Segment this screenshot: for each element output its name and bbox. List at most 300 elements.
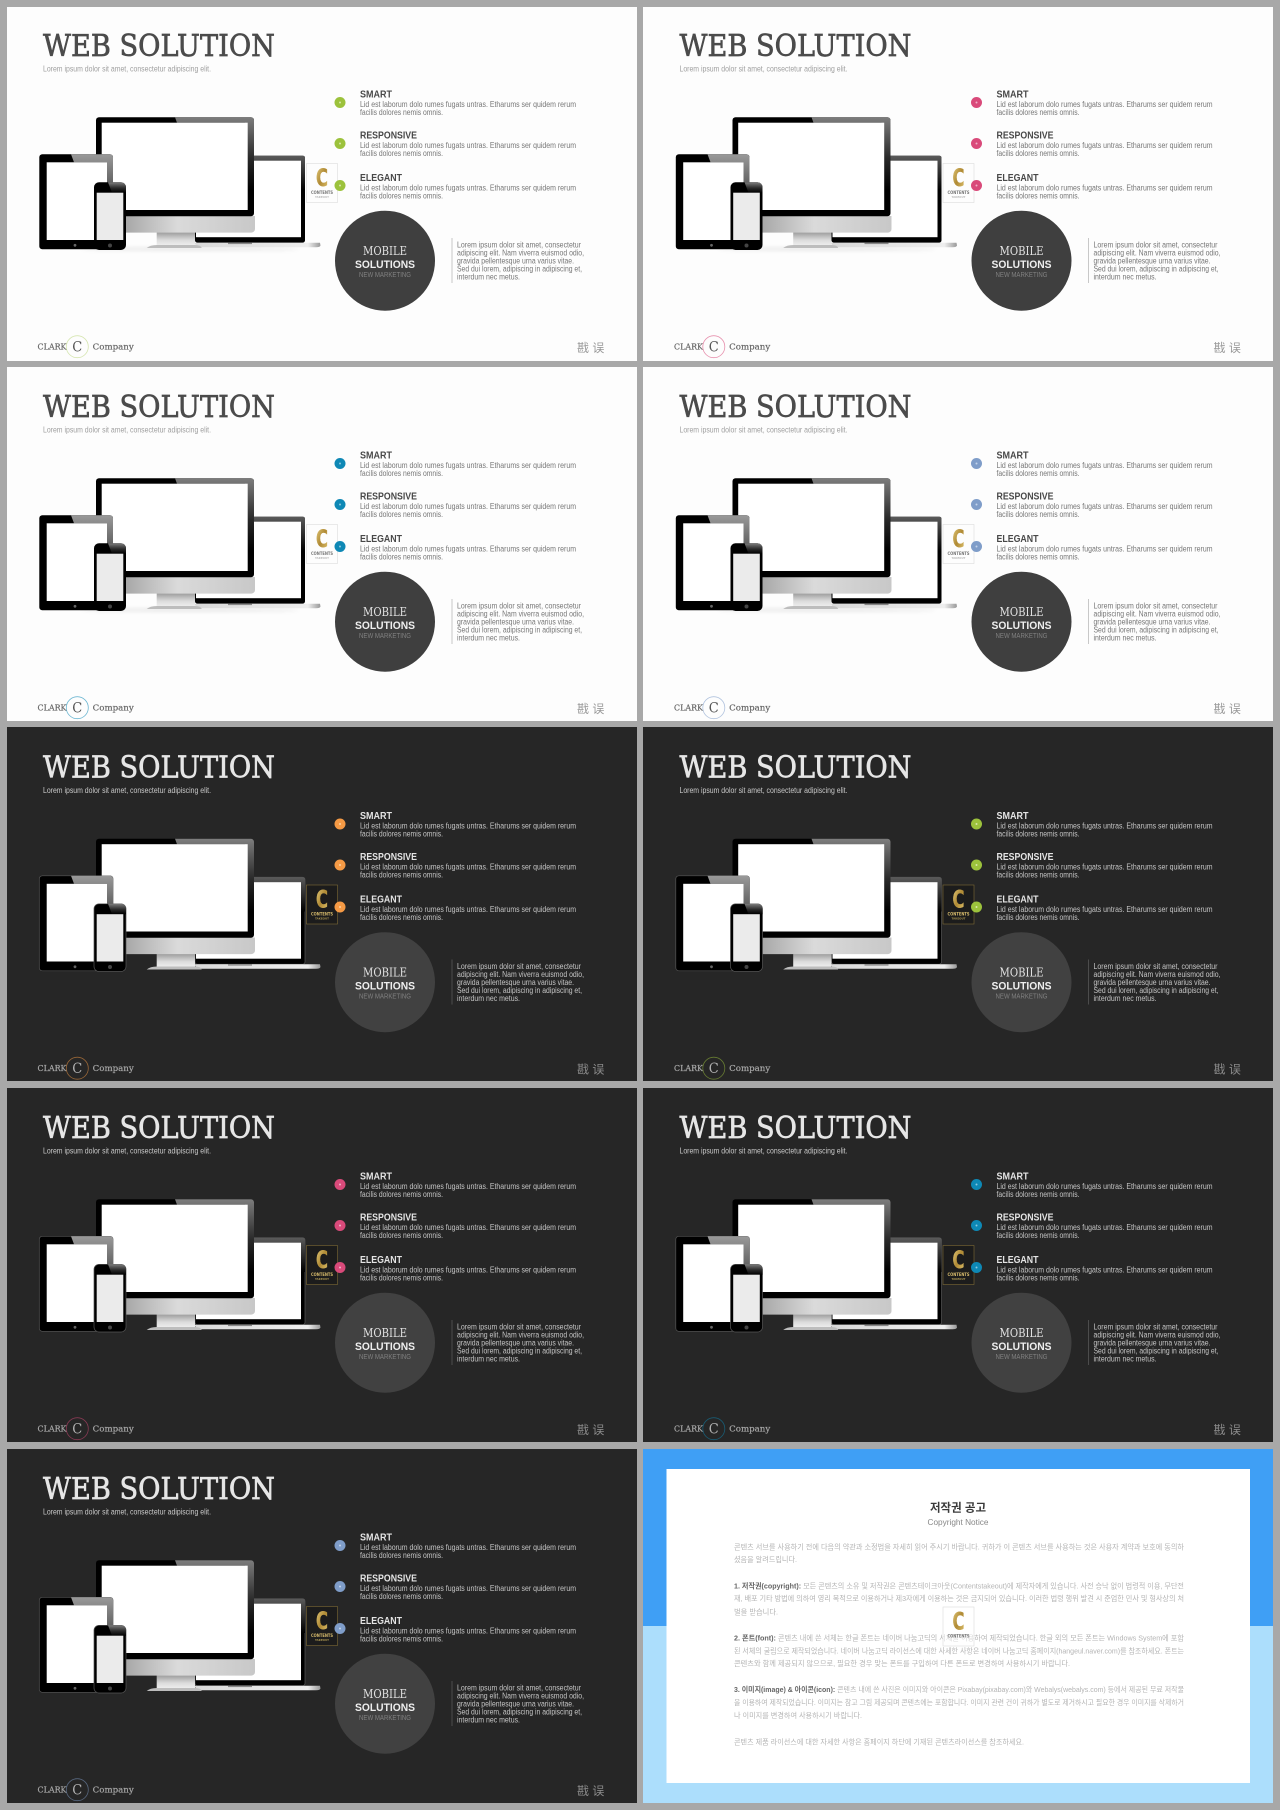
logo [674, 336, 770, 358]
badge watermark: CONTENTS [948, 1634, 970, 1640]
description text: adipiscing elit. Nam viverra euismod odio, [457, 1691, 584, 1701]
footer glyphs: 戡 误 [1214, 341, 1241, 355]
logo: Company [93, 342, 134, 352]
subtitle: Lorem ipsum dolor sit amet, consectetur adipiscing elit. [680, 1146, 848, 1156]
logo [674, 1418, 770, 1440]
feature: elegant: Lid est laborum dolo rumes fugats untras. Etharums ser quidem rerum [360, 905, 576, 914]
subtitle: Lorem ipsum dolor sit amet, consectetur adipiscing elit. [43, 1146, 211, 1156]
description text: Lorem ipsum dolor sit amet, consectetur [457, 240, 581, 249]
feature: responsive [971, 852, 1213, 879]
badge: C [316, 525, 328, 553]
copyright heading: 저작권 공고 [930, 1500, 986, 1514]
feature: responsive: Lid est laborum dolo rumes fugats untras. Etharums ser quidem rerum [996, 141, 1213, 150]
feature: elegant: ELEGANT [360, 894, 403, 905]
badge watermark [943, 1607, 974, 1646]
feature: responsive [334, 130, 576, 158]
device mockups [676, 117, 957, 250]
badge: TAKEOUT [315, 1277, 329, 1281]
description text: interdum nec metus. [1094, 994, 1156, 1003]
description text: Lorem ipsum dolor sit amet, consectetur [457, 962, 581, 971]
slide 7 content [38, 1111, 604, 1440]
footer glyphs: 戡 误 [577, 341, 604, 355]
title: WEB SOLUTION [43, 1472, 275, 1507]
description text [452, 960, 584, 1004]
feature: elegant: ELEGANT [360, 173, 403, 184]
description text: Sed dui lorem, adipiscing in adipiscing et, [1094, 626, 1218, 635]
feature: elegant: facilis dolores nemis omnis. [360, 913, 443, 922]
feature: elegant [971, 894, 1213, 922]
badge [306, 885, 338, 924]
section 1 copyright: 재, 배포 기타 방법에 의하여 영리 목적으로 이용하거나 제3자에게 이용하는 것은 금지되어 있습니다. 이러한 법령 행위 발견 시 준엄한 민사 및 형사상의 처 [734, 1594, 1184, 1603]
feature: elegant [334, 1616, 576, 1643]
feature: elegant: facilis dolores nemis omnis. [360, 191, 443, 200]
logo: Company [729, 1424, 770, 1434]
section 1 copyright [734, 1582, 1184, 1616]
subtitle: Lorem ipsum dolor sit amet, consectetur adipiscing elit. [680, 426, 848, 434]
section 3 image and icon: 을 이용하여 제작되었습니다. 이미지는 참고 그림 제공되며 콘텐츠에는 포함합니다. 이미지 관련 건이 귀하가 별도로 제거하시고 필요한 경우 이미지를 삭제하거 [734, 1698, 1184, 1707]
feature: responsive: facilis dolores nemis omnis. [996, 870, 1080, 879]
feature: smart: Lid est laborum dolo rumes fugats untras. Etharums ser quidem rerum [996, 821, 1213, 830]
description text: adipiscing elit. Nam viverra euismod odio, [457, 248, 584, 258]
slide 8 content [674, 1111, 1241, 1440]
footer glyphs: 戡 误 [577, 1062, 604, 1076]
feature: smart: SMART [360, 1532, 393, 1543]
section 3 image and icon: 3. 이미지(image) & 아이콘(icon): 콘텐츠 내에 쓴 사진은 이미지와 아이콘은 Pixabay(pixabay.com)와 Webalys(webalys.com) 등에서 제공된 무료 저작물 [734, 1685, 1184, 1694]
logo: Company [729, 342, 770, 352]
slide 4 content [674, 390, 1241, 719]
feature: responsive: RESPONSIVE [360, 1573, 417, 1584]
logo: C [709, 340, 719, 356]
description text: Lorem ipsum dolor sit amet, consectetur [457, 601, 581, 610]
circle: mobile solutions: NEW MARKETING [359, 1715, 411, 1722]
logo: CLARK [38, 1064, 67, 1074]
logo: C [72, 1782, 82, 1798]
feature: smart: SMART [996, 1171, 1029, 1182]
section 2 font [734, 1634, 1184, 1668]
feature: responsive: facilis dolores nemis omnis. [360, 149, 443, 158]
circle: mobile solutions: MOBILE [363, 244, 407, 258]
circle: mobile solutions: SOLUTIONS [355, 980, 415, 992]
circle: mobile solutions: NEW MARKETING [996, 633, 1048, 640]
panel: slide 5 dark orange [7, 727, 637, 1081]
feature: smart [334, 450, 576, 478]
description text: interdum nec metus. [1094, 273, 1156, 282]
subtitle: Lorem ipsum dolor sit amet, consectetur adipiscing elit. [43, 64, 211, 74]
description text: Lorem ipsum dolor sit amet, consectetur [1094, 601, 1218, 610]
title: WEB SOLUTION [43, 750, 275, 786]
feature: responsive [971, 130, 1213, 158]
slide 9 content [38, 1472, 604, 1801]
feature: elegant: Lid est laborum dolo rumes fugats untras. Etharums ser quidem rerum [996, 183, 1213, 192]
circle: mobile solutions: MOBILE [363, 966, 407, 980]
feature: responsive: facilis dolores nemis omnis. [360, 1592, 443, 1601]
badge [943, 524, 974, 564]
feature: smart [334, 1171, 576, 1199]
feature: elegant: ELEGANT [360, 1616, 403, 1627]
description text: adipiscing elit. Nam viverra euismod odio, [1094, 1330, 1220, 1340]
feature: responsive: facilis dolores nemis omnis. [360, 1231, 443, 1240]
feature: responsive: facilis dolores nemis omnis. [360, 870, 443, 879]
description text [452, 238, 584, 283]
badge: CONTENTS [948, 1272, 970, 1278]
description text: gravida pellentesque urna varius vitae. [1094, 618, 1210, 627]
badge: CONTENTS [311, 190, 333, 196]
footer glyphs: 戡 误 [577, 702, 604, 716]
feature: elegant [971, 534, 1213, 561]
description text: Sed dui lorem, adipiscing in adipiscing et, [1094, 265, 1218, 274]
feature: elegant: Lid est laborum dolo rumes fugats untras. Etharums ser quidem rerum [360, 1265, 576, 1274]
section 3 image and icon [734, 1685, 1184, 1720]
copyright subheading: Copyright Notice [928, 1517, 989, 1527]
feature: elegant [334, 173, 576, 200]
description text: Sed dui lorem, adipiscing in adipiscing et, [457, 1347, 582, 1356]
feature: elegant: ELEGANT [360, 534, 403, 545]
circle: mobile solutions: SOLUTIONS [355, 620, 415, 632]
circle: mobile solutions: SOLUTIONS [992, 1341, 1052, 1353]
badge: C [952, 164, 964, 192]
badge: CONTENTS [948, 551, 970, 557]
footer glyphs: 戡 误 [1214, 1423, 1241, 1437]
description text: interdum nec metus. [457, 1716, 520, 1725]
description text: gravida pellentesque urna varius vitae. [457, 1339, 574, 1348]
description text [452, 1320, 584, 1365]
feature: elegant [971, 173, 1213, 200]
feature: elegant: Lid est laborum dolo rumes fugats untras. Etharums ser quidem rerum [996, 905, 1213, 914]
feature: smart: facilis dolores nemis omnis. [996, 108, 1080, 117]
circle: mobile solutions [335, 1293, 435, 1393]
section 2 font: 된 서체의 굴림으로 제작되었습니다. 네이버 나눔고딕 라이선스에 대한 사세한 사항은 네이버 나눔고딕 홈페이지(hangeul.naver.com)를 참조하세요. 폰트는 [734, 1646, 1184, 1656]
feature: smart: Lid est laborum dolo rumes fugats untras. Etharums ser quidem rerum [996, 100, 1213, 109]
circle: mobile solutions [335, 1654, 435, 1754]
badge: C [316, 164, 328, 192]
description text: gravida pellentesque urna varius vitae. [1094, 1339, 1210, 1348]
slide 6 content [674, 750, 1241, 1079]
feature: elegant: Lid est laborum dolo rumes fugats untras. Etharums ser quidem rerum [360, 1626, 576, 1635]
feature: smart: facilis dolores nemis omnis. [996, 1190, 1080, 1199]
logo: C [709, 1061, 719, 1077]
panel: slide 4 light periwinkle [643, 367, 1273, 721]
logo [38, 336, 134, 358]
logo: Company [93, 1424, 134, 1434]
feature: smart [971, 89, 1213, 117]
description text: Lorem ipsum dolor sit amet, consectetur [1094, 962, 1218, 971]
logo [38, 697, 134, 719]
description text: gravida pellentesque urna varius vitae. [457, 618, 574, 627]
description text: Sed dui lorem, adipiscing in adipiscing et, [457, 986, 582, 995]
description text: interdum nec metus. [457, 994, 520, 1003]
logo: C [72, 340, 82, 356]
feature: responsive: Lid est laborum dolo rumes fugats untras. Etharums ser quidem rerum [360, 1584, 576, 1593]
description text: adipiscing elit. Nam viverra euismod odio, [1094, 609, 1220, 619]
feature: elegant: ELEGANT [996, 1255, 1039, 1266]
feature: smart: Lid est laborum dolo rumes fugats untras. Etharums ser quidem rerum [360, 100, 576, 109]
description text: Sed dui lorem, adipiscing in adipiscing et, [1094, 1347, 1218, 1356]
device mockups [676, 1199, 957, 1332]
intro paragraph: 셨음을 알려드립니다. [734, 1555, 797, 1564]
feature: elegant: facilis dolores nemis omnis. [996, 913, 1080, 922]
footer glyphs: 戡 误 [1214, 1062, 1241, 1076]
description text: gravida pellentesque urna varius vitae. [1094, 257, 1210, 266]
panel: copyright notice [643, 1449, 1273, 1803]
logo: Company [93, 1786, 134, 1796]
circle: mobile solutions [972, 211, 1072, 311]
title: WEB SOLUTION [43, 390, 275, 425]
feature: smart: Lid est laborum dolo rumes fugats untras. Etharums ser quidem rerum [360, 1543, 576, 1552]
feature: responsive [334, 852, 576, 879]
feature: smart: facilis dolores nemis omnis. [360, 1190, 443, 1199]
feature: elegant: facilis dolores nemis omnis. [996, 552, 1080, 561]
badge: CONTENTS [311, 1633, 333, 1639]
badge: C [316, 1607, 328, 1635]
device mockups [39, 117, 321, 250]
slide 5 content [38, 750, 604, 1079]
feature: responsive: RESPONSIVE [996, 130, 1054, 141]
section 2 font: 2. 폰트(font): 콘텐츠 내에 쓴 서체는 한글 폰트는 네이버 나눔고딕의 서체를 이용하여 제작되었습니다. 한글 외의 모든 폰트는 Windows System에 포함 [734, 1634, 1184, 1642]
badge: TAKEOUT [315, 916, 329, 920]
feature: elegant: facilis dolores nemis omnis. [360, 552, 443, 561]
circle: mobile solutions: SOLUTIONS [992, 259, 1052, 271]
feature: smart: Lid est laborum dolo rumes fugats untras. Etharums ser quidem rerum [360, 821, 576, 830]
circle: mobile solutions [972, 932, 1072, 1032]
circle: mobile solutions: MOBILE [1000, 244, 1044, 258]
footer glyphs: 戡 误 [577, 1423, 604, 1437]
logo: Company [729, 704, 770, 714]
feature: smart: Lid est laborum dolo rumes fugats untras. Etharums ser quidem rerum [996, 1182, 1213, 1191]
feature: elegant: ELEGANT [360, 1255, 403, 1266]
badge: C [316, 886, 328, 914]
description text: Lorem ipsum dolor sit amet, consectetur [457, 1683, 581, 1692]
badge: TAKEOUT [315, 556, 329, 560]
badge: CONTENTS [311, 551, 333, 557]
feature: elegant [334, 1255, 576, 1282]
circle: mobile solutions [972, 1293, 1072, 1393]
panel: slide 6 dark green [643, 727, 1273, 1081]
section 1 copyright: 1. 저작권(copyright): 모든 콘텐츠의 소유 및 저작권은 콘텐츠테이크아웃(Contentstakeout)에 제작자에게 있습니다. 사전 승낙 없이 법령적 이용, 무단전 [734, 1582, 1184, 1590]
feature: responsive: RESPONSIVE [360, 130, 417, 141]
title: WEB SOLUTION [43, 29, 275, 64]
badge: C [952, 525, 964, 553]
description text: Sed dui lorem, adipiscing in adipiscing et, [457, 626, 582, 635]
feature: smart [334, 89, 576, 117]
feature: responsive: facilis dolores nemis omnis. [996, 510, 1080, 519]
logo: Company [93, 1064, 134, 1074]
description text [1088, 960, 1220, 1004]
panel: slide 7 dark pink [7, 1088, 637, 1442]
device mockups [39, 1199, 321, 1332]
intro paragraph: 콘텐츠 서브를 사용하기 전에 다음의 약관과 소정법을 자세히 읽어 주시기 바랍니다. 귀하가 이 콘텐츠 서브를 사용하는 것은 사용자 계약과 보호에 동의하 [734, 1542, 1184, 1552]
feature: smart: facilis dolores nemis omnis. [360, 829, 443, 838]
circle: mobile solutions: NEW MARKETING [359, 994, 411, 1000]
panel: slide 1 light green [7, 7, 637, 361]
description text: adipiscing elit. Nam viverra euismod odio, [457, 970, 584, 979]
feature: elegant: facilis dolores nemis omnis. [360, 1634, 443, 1643]
badge [943, 164, 974, 202]
description text: interdum nec metus. [457, 634, 520, 643]
device mockups [39, 478, 321, 612]
title: WEB SOLUTION [680, 29, 912, 64]
title: WEB SOLUTION [680, 390, 912, 425]
device mockups [39, 839, 321, 972]
badge: TAKEOUT [952, 916, 966, 920]
circle: mobile solutions: SOLUTIONS [355, 259, 415, 271]
footer glyphs: 戡 误 [1214, 702, 1241, 716]
badge: CONTENTS [948, 190, 970, 196]
circle: mobile solutions: MOBILE [1000, 966, 1044, 980]
slide 3 content [38, 390, 604, 719]
badge: TAKEOUT [952, 195, 966, 199]
logo [38, 1779, 134, 1801]
description text: adipiscing elit. Nam viverra euismod odio, [1094, 970, 1220, 979]
feature: responsive [334, 1573, 576, 1601]
description text [1088, 599, 1220, 644]
feature: responsive [334, 1212, 576, 1240]
feature: elegant: ELEGANT [996, 534, 1039, 545]
feature: responsive: facilis dolores nemis omnis. [996, 1231, 1080, 1240]
description text [1088, 1320, 1220, 1365]
feature: smart: Lid est laborum dolo rumes fugats untras. Etharums ser quidem rerum [360, 1182, 576, 1191]
circle: mobile solutions: MOBILE [363, 1326, 407, 1340]
feature: smart: Lid est laborum dolo rumes fugats untras. Etharums ser quidem rerum [996, 461, 1213, 470]
badge [943, 885, 974, 924]
feature: smart [971, 1171, 1213, 1199]
logo: Company [729, 1064, 770, 1074]
circle: mobile solutions: MOBILE [1000, 605, 1044, 619]
feature: smart: SMART [360, 89, 393, 100]
logo [674, 697, 770, 719]
feature: responsive: Lid est laborum dolo rumes fugats untras. Etharums ser quidem rerum [996, 1223, 1213, 1232]
feature: elegant: facilis dolores nemis omnis. [996, 1273, 1080, 1282]
feature: smart: facilis dolores nemis omnis. [996, 469, 1080, 478]
description text [1088, 238, 1220, 283]
badge: TAKEOUT [952, 556, 966, 560]
badge: CONTENTS [311, 1272, 333, 1278]
description text: interdum nec metus. [1094, 1355, 1156, 1364]
feature: responsive: RESPONSIVE [360, 491, 417, 502]
feature: responsive: RESPONSIVE [996, 491, 1054, 502]
description text: adipiscing elit. Nam viverra euismod odio, [457, 609, 584, 619]
device mockups [676, 478, 957, 612]
feature: elegant: Lid est laborum dolo rumes fugats untras. Etharums ser quidem rerum [996, 544, 1213, 553]
description text: interdum nec metus. [457, 1355, 520, 1364]
badge: TAKEOUT [315, 1638, 329, 1642]
description text: Lorem ipsum dolor sit amet, consectetur [1094, 240, 1218, 249]
feature: smart: facilis dolores nemis omnis. [360, 1551, 443, 1560]
subtitle: Lorem ipsum dolor sit amet, consectetur adipiscing elit. [43, 1508, 211, 1516]
feature: responsive: Lid est laborum dolo rumes fugats untras. Etharums ser quidem rerum [360, 1223, 576, 1232]
section 2 font: 콘텐츠와 함께 제공되지 않으므로, 필요한 경우 맞는 폰트를 구입하여 다른 폰트로 변경하여 사용하시기 바랍니다. [734, 1659, 1070, 1668]
circle: mobile solutions: SOLUTIONS [992, 620, 1052, 632]
section 1 copyright: 벌을 받습니다. [734, 1608, 778, 1616]
feature: responsive: RESPONSIVE [360, 1212, 417, 1223]
panel: slide 2 light pink [643, 7, 1273, 361]
feature: responsive: RESPONSIVE [996, 1212, 1054, 1223]
description text [452, 1681, 584, 1726]
feature: elegant: Lid est laborum dolo rumes fugats untras. Etharums ser quidem rerum [360, 183, 576, 192]
badge [306, 164, 338, 202]
device mockups [39, 1560, 321, 1694]
feature: responsive: RESPONSIVE [360, 852, 417, 863]
badge: C [952, 1246, 964, 1274]
circle: mobile solutions: MOBILE [363, 605, 407, 619]
circle: mobile solutions: SOLUTIONS [355, 1341, 415, 1353]
feature: smart [334, 811, 576, 838]
feature: elegant: ELEGANT [996, 894, 1039, 905]
feature: smart [971, 450, 1213, 478]
logo: C [72, 1422, 82, 1438]
badge: C [316, 1246, 328, 1274]
feature: responsive: Lid est laborum dolo rumes fugats untras. Etharums ser quidem rerum [996, 502, 1213, 511]
circle: mobile solutions [972, 572, 1072, 672]
feature: responsive [971, 1212, 1213, 1240]
logo: CLARK [38, 342, 67, 352]
logo: CLARK [674, 1424, 704, 1434]
feature: elegant [971, 1255, 1213, 1282]
description text: Lorem ipsum dolor sit amet, consectetur [457, 1322, 581, 1331]
badge: CONTENTS [311, 912, 333, 918]
feature: elegant: Lid est laborum dolo rumes fugats untras. Etharums ser quidem rerum [360, 544, 576, 553]
feature: smart: facilis dolores nemis omnis. [360, 469, 443, 478]
badge [306, 1606, 338, 1646]
subtitle: Lorem ipsum dolor sit amet, consectetur adipiscing elit. [680, 64, 848, 74]
logo: CLARK [38, 704, 67, 714]
feature: responsive: facilis dolores nemis omnis. [996, 149, 1080, 158]
footer glyphs: 戡 误 [577, 1784, 604, 1798]
badge watermark: C [952, 1608, 964, 1636]
feature: smart: SMART [360, 811, 393, 822]
description text: Sed dui lorem, adipiscing in adipiscing et, [457, 1708, 582, 1717]
circle: mobile solutions [335, 932, 435, 1032]
logo: C [72, 700, 82, 716]
feature: elegant [334, 894, 576, 922]
description text: gravida pellentesque urna varius vitae. [1094, 978, 1210, 987]
description text: Sed dui lorem, adipiscing in adipiscing et, [1094, 986, 1218, 995]
logo: CLARK [674, 342, 704, 352]
feature: responsive: Lid est laborum dolo rumes fugats untras. Etharums ser quidem rerum [996, 862, 1213, 871]
logo: CLARK [674, 1064, 704, 1074]
description text: gravida pellentesque urna varius vitae. [457, 257, 574, 266]
description text: gravida pellentesque urna varius vitae. [457, 978, 574, 987]
description text: interdum nec metus. [457, 273, 520, 282]
device mockups [676, 839, 957, 972]
logo: C [72, 1061, 82, 1077]
subtitle: Lorem ipsum dolor sit amet, consectetur adipiscing elit. [43, 786, 211, 795]
circle: mobile solutions: SOLUTIONS [355, 1702, 415, 1714]
badge: TAKEOUT [315, 195, 329, 199]
badge: CONTENTS [948, 912, 970, 918]
badge [943, 1246, 974, 1284]
feature: smart: SMART [360, 1171, 393, 1182]
feature: smart: SMART [996, 89, 1029, 100]
feature: smart: facilis dolores nemis omnis. [996, 829, 1080, 838]
feature: smart: SMART [360, 450, 393, 461]
badge [306, 1246, 338, 1284]
description text: adipiscing elit. Nam viverra euismod odio, [1094, 248, 1220, 258]
badge: TAKEOUT [952, 1277, 966, 1281]
subtitle: Lorem ipsum dolor sit amet, consectetur adipiscing elit. [43, 426, 211, 434]
feature: elegant: ELEGANT [996, 173, 1039, 184]
logo [674, 1057, 770, 1079]
closing note: 콘텐츠 제품 라이선스에 대한 자세한 사항은 홈페이지 하단에 기재된 콘텐츠라이선스를 참조하세요. [734, 1738, 1024, 1746]
logo: C [709, 700, 719, 716]
feature: smart: SMART [996, 450, 1029, 461]
description text: gravida pellentesque urna varius vitae. [457, 1700, 574, 1709]
circle: mobile solutions: NEW MARKETING [359, 1354, 411, 1361]
title: WEB SOLUTION [43, 1111, 275, 1146]
feature: smart [334, 1532, 576, 1560]
circle: mobile solutions: MOBILE [363, 1687, 407, 1701]
subtitle: Lorem ipsum dolor sit amet, consectetur adipiscing elit. [680, 786, 848, 795]
circle: mobile solutions: SOLUTIONS [992, 980, 1052, 992]
